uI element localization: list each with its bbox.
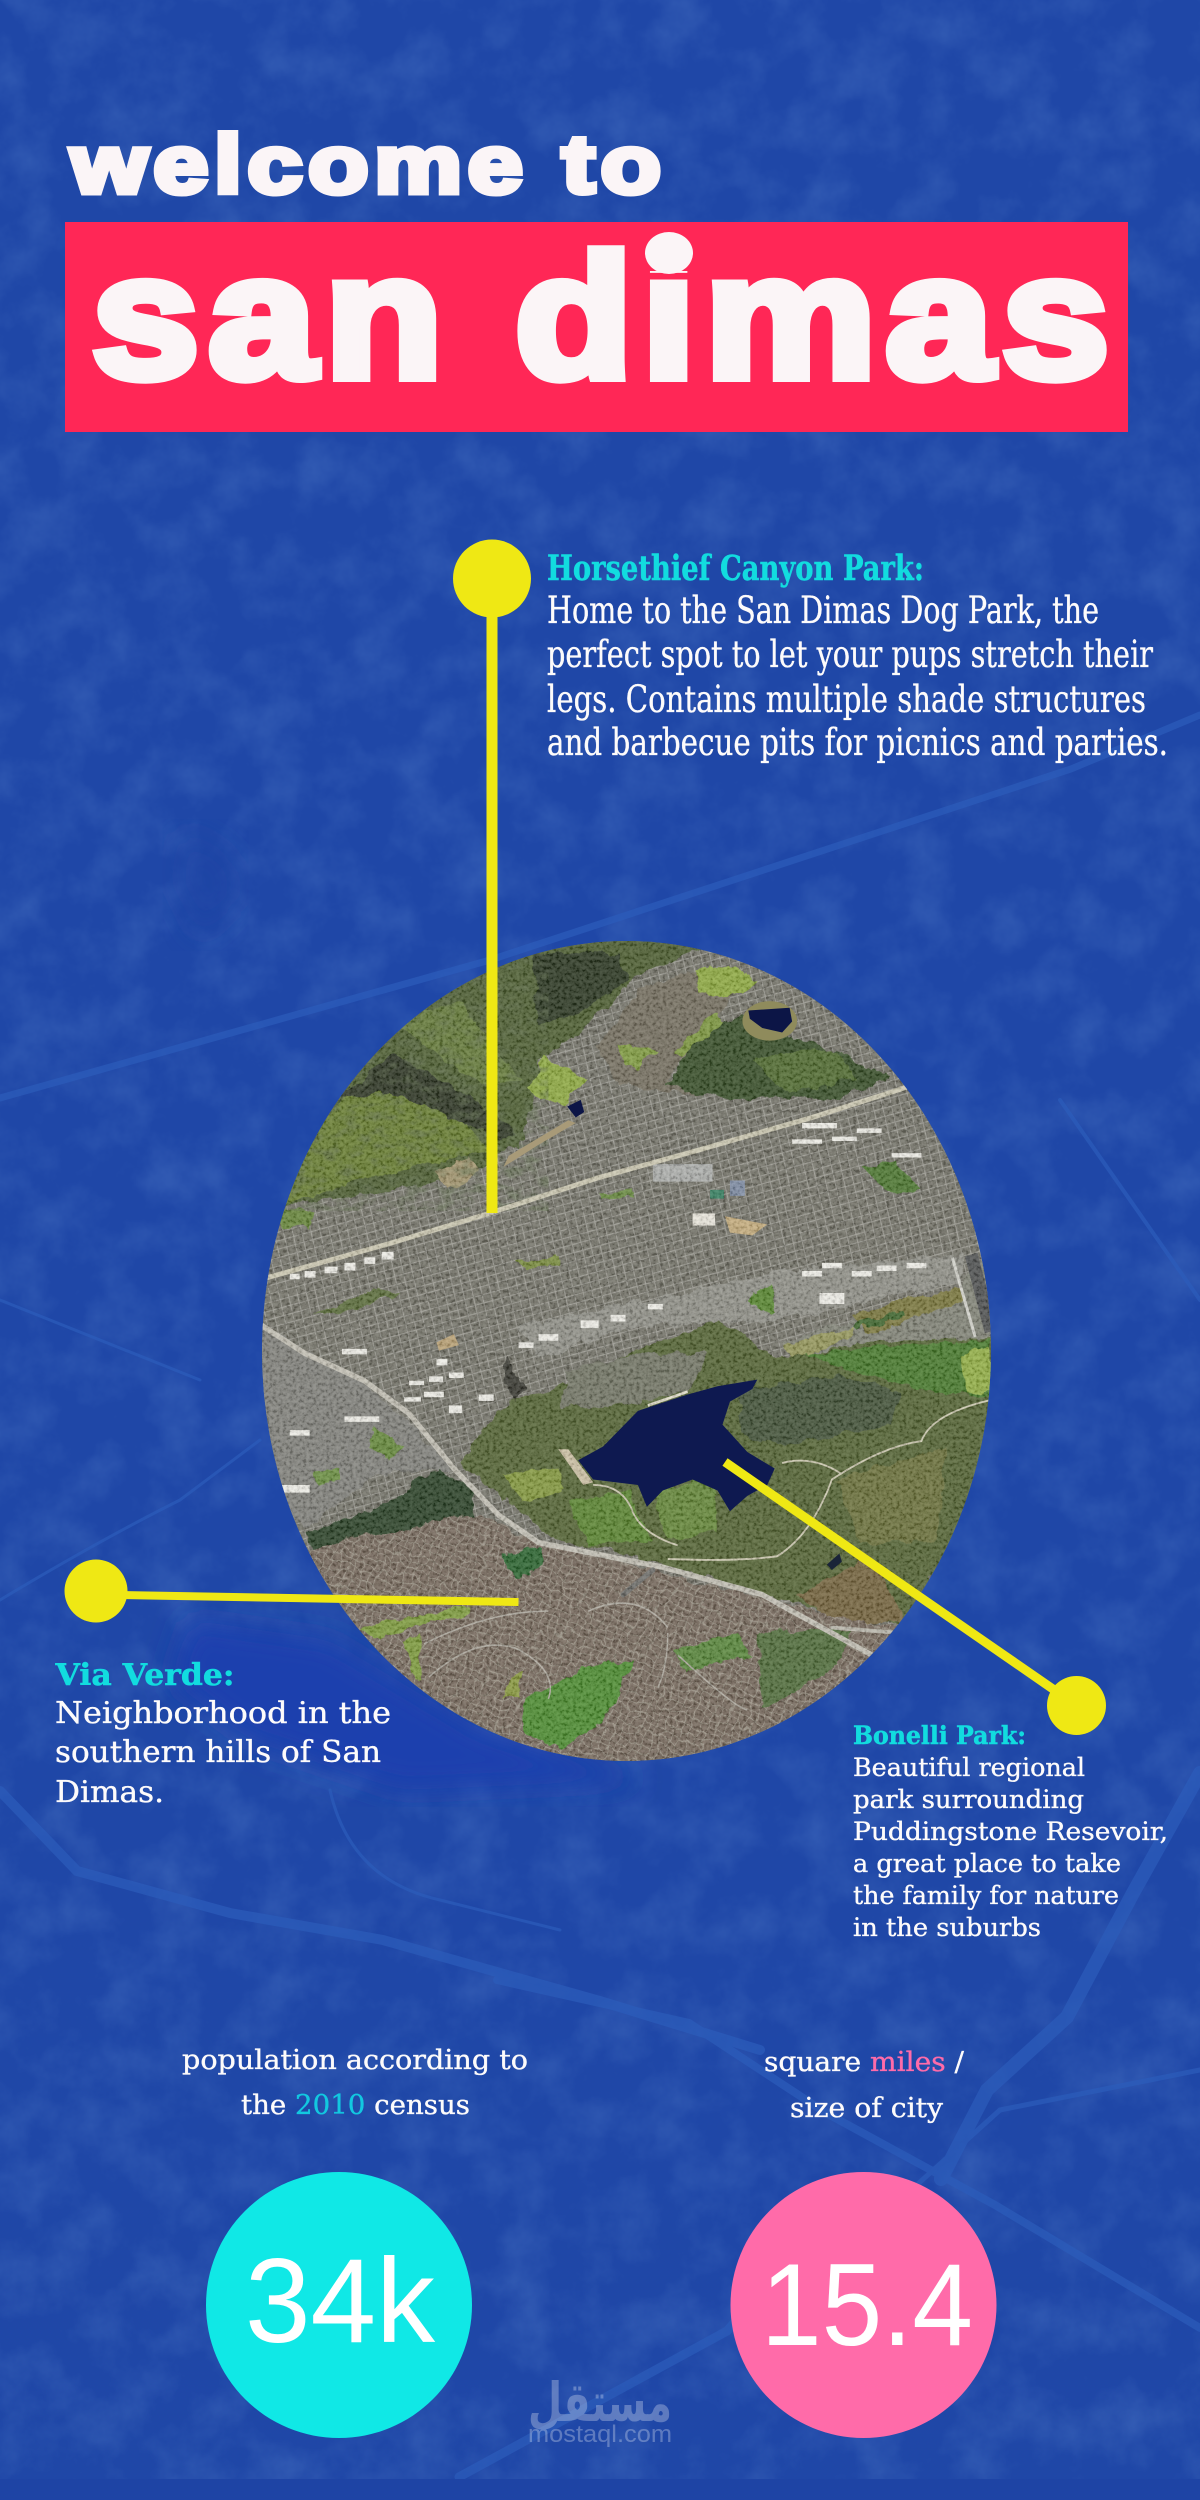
callout: Horsethief Canyon Park: Horsethief Canyon Park: — [547, 548, 924, 589]
pointer: Bonelli Park — [725, 1462, 1106, 1735]
callout: Via Verde: southern hills of San — [55, 1735, 381, 1770]
aerial map circle — [262, 941, 991, 1761]
stat label: square miles: size of city — [790, 2093, 944, 2124]
watermark: mostaql: مستقل — [528, 2371, 672, 2434]
pointer: Horsethief Canyon Park — [453, 540, 531, 1213]
airport — [782, 1249, 991, 1359]
callout: Bonelli Park: the family for nature — [853, 1881, 1119, 1910]
light commercial strip — [519, 1255, 961, 1359]
stat label: population: the 2010 census — [241, 2090, 470, 2121]
callout: Bonelli Park — [853, 1721, 1168, 1942]
pointer: Via Verde — [64, 1560, 518, 1622]
stat label: population: population according to — [182, 2045, 528, 2076]
callout: Via Verde: Via Verde: — [54, 1658, 235, 1693]
stat circle: 15.4: 15.4 — [761, 2239, 973, 2370]
watermark: mostaql: mostaql.com — [528, 2421, 672, 2448]
freeways — [262, 1087, 907, 1655]
north hills and suburbs — [598, 969, 737, 1096]
stat circle: 34k: 34k — [245, 2234, 436, 2368]
callout: Bonelli Park: park surrounding — [853, 1785, 1084, 1814]
callout: Bonelli Park: in the suburbs — [853, 1913, 1041, 1942]
west commercial — [260, 1326, 454, 1529]
callout: Bonelli Park: Puddingstone Resevoir, — [853, 1817, 1168, 1846]
callout: Bonelli Park: Bonelli Park: — [853, 1721, 1026, 1750]
golf courses — [695, 964, 757, 1000]
dam — [558, 1449, 593, 1485]
stat circle: 15.4 — [730, 2172, 996, 2438]
pond — [567, 1100, 584, 1117]
buildings — [280, 1123, 926, 1493]
callout: Via Verde: Dimas. — [55, 1775, 164, 1810]
lake — [578, 1380, 775, 1511]
title banner: san dimas: san dimas — [92, 218, 1119, 414]
callout: Bonelli Park: Beautiful regional — [853, 1753, 1085, 1782]
stat label: square miles: square miles / — [764, 2047, 965, 2078]
callout: Via Verde: Neighborhood in the — [55, 1696, 391, 1731]
stat circle: 34k — [206, 2172, 472, 2438]
park trails — [593, 1392, 991, 1560]
city greens and details — [598, 1189, 633, 1201]
south residential — [308, 1514, 896, 1761]
title: welcome to: welcome to — [70, 119, 667, 211]
south-east park — [459, 1320, 1020, 1628]
dark tree band — [304, 1469, 474, 1550]
foothills tan patch — [434, 1156, 479, 1189]
callout: Horsethief Canyon Park — [547, 548, 1168, 764]
callout: Bonelli Park: a great place to take — [853, 1849, 1121, 1878]
callout: Via Verde — [54, 1658, 391, 1810]
stat label: population — [182, 2045, 528, 2121]
mountains — [285, 941, 701, 1207]
watermark: mostaql — [528, 2371, 672, 2448]
dark golf and residential — [280, 1211, 315, 1227]
stat label: square miles — [764, 2047, 965, 2124]
reservoir — [742, 1001, 797, 1041]
urban base — [262, 941, 991, 1761]
